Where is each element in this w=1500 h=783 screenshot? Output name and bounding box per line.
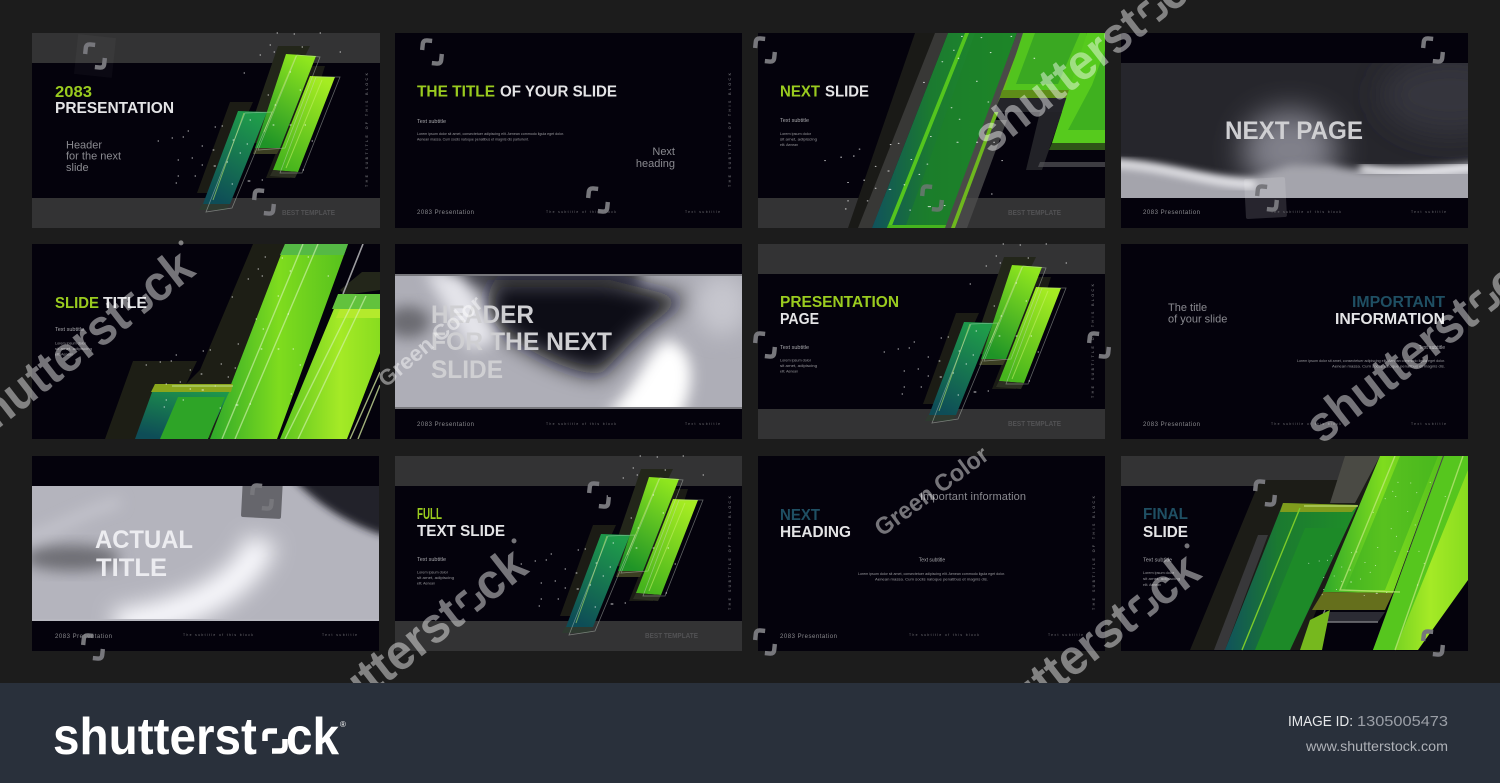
panel: slide 5, slide title: Text subtitle bbox=[55, 327, 84, 333]
panel: slide 2, title of your slide: Text subtitle bbox=[685, 210, 720, 214]
footer bar bbox=[0, 683, 1500, 783]
panel: slide 4, next page: The subtitle of this block bbox=[1271, 210, 1341, 214]
panel: slide 2, title of your slide: THE TITLE bbox=[417, 84, 495, 100]
watermark: shutterstock top bbox=[962, 0, 1226, 164]
panel: slide 12, final slide bbox=[1121, 456, 1468, 655]
panel: slide 10, full text slide: elit. Aenean bbox=[417, 582, 435, 586]
panel: slide 10, full text slide: Lorem ipsum dolor bbox=[417, 570, 449, 574]
panel: slide 7, presentation page bbox=[754, 244, 1110, 439]
panel: slide 2, title of your slide: THE SUBTITLE OF THIS BLOCK bbox=[728, 72, 732, 187]
panel: slide 5, slide title: SLIDE bbox=[55, 295, 99, 312]
panel: slide 10, full text slide: FULL bbox=[417, 506, 442, 523]
panel: slide 5, slide title bbox=[32, 244, 380, 439]
panel: slide 3, next slide bbox=[754, 33, 1105, 228]
watermark: shutterstock right bbox=[1294, 231, 1500, 454]
panel: slide 8, important information: 2083 Presentation bbox=[1143, 422, 1200, 428]
panel: slide 3, next slide: sit amet, adipiscing bbox=[780, 138, 817, 142]
panel: slide 11, next heading: Text subtitle bbox=[919, 558, 945, 564]
panel: slide 11, next heading bbox=[754, 456, 1105, 654]
panel: slide 3, next slide: Text subtitle bbox=[780, 118, 809, 124]
shutterstock logo: shutterstock bbox=[53, 708, 339, 766]
panel: slide 8, important information: Text subtitle bbox=[1419, 345, 1445, 351]
panel: slide 1, 2083 presentation: BEST TEMPLATE bbox=[282, 210, 335, 217]
panel: slide 10, full text slide: TEXT SLIDE bbox=[417, 523, 505, 540]
panel: slide 9, actual title: TITLE bbox=[96, 554, 167, 582]
panel: slide 9, actual title: The subtitle of this block bbox=[183, 633, 253, 637]
panel: slide 1, 2083 presentation: slide bbox=[66, 162, 89, 174]
panel: slide 12, final slide: SLIDE bbox=[1143, 524, 1188, 541]
panel: slide 2, title of your slide: Next bbox=[652, 146, 675, 158]
panel: slide 4, next page: NEXT PAGE bbox=[1225, 117, 1363, 145]
panel: slide 3, next slide: NEXT bbox=[780, 84, 820, 100]
grey silk image bbox=[395, 274, 742, 409]
panel: slide 6, header for the next slide: FOR THE NEXT bbox=[431, 328, 612, 356]
panel: slide 6, header for the next slide: The subtitle of this block bbox=[546, 422, 616, 426]
watermark: shutterstock left bbox=[0, 233, 211, 456]
panel: slide 9, actual title bbox=[20, 456, 400, 659]
panel: slide 5, slide title: TITLE bbox=[103, 295, 147, 312]
panel: slide 12, final slide: elit. Aenean bbox=[1143, 583, 1161, 587]
panel: slide 11, next heading: Lorem ipsum dolor sit amet, consectetuer adipiscing elit. Aenean commodo ligula eget dolor. bbox=[858, 572, 1005, 576]
panel: slide 7, presentation page: elit. Aenean bbox=[780, 370, 798, 374]
panel: slide 8, important information: Aenean massa. Cum sociis natoque penatibus et magnis dis. bbox=[1332, 364, 1445, 368]
panel: slide 10, full text slide: THE SUBTITLE OF THIS BLOCK bbox=[728, 495, 732, 610]
panel: slide 9, actual title: Text subtitle bbox=[322, 633, 357, 637]
panel: slide 6, header for the next slide: Text subtitle bbox=[685, 422, 720, 426]
panel: slide 11, next heading: THE SUBTITLE OF THIS BLOCK bbox=[1092, 495, 1096, 610]
panel: slide 1, 2083 presentation: Header bbox=[66, 140, 102, 152]
panel: slide 9, actual title: 2083 Presentation bbox=[55, 634, 112, 640]
panel: slide 11, next heading: The subtitle of this block bbox=[909, 633, 979, 637]
watermark: shutterstock lower middle bbox=[280, 531, 544, 754]
panel: slide 10, full text slide: BEST TEMPLATE bbox=[645, 633, 698, 640]
panel: slide 3, next slide: BEST TEMPLATE bbox=[1008, 210, 1061, 217]
panel: slide 10, full text slide: Text subtitle bbox=[417, 557, 446, 563]
panel: slide 2, title of your slide: OF YOUR SLIDE bbox=[500, 84, 617, 100]
panel: slide 10, full text slide: sit amet, adipiscing bbox=[417, 576, 454, 580]
panel: slide 11, next heading: NEXT bbox=[780, 507, 820, 524]
panel: slide 2, title of your slide: Aenean massa. Cum sociis natoque penatibus et magnis dis parturient. bbox=[417, 138, 529, 142]
footer bar: 1305005473 bbox=[1357, 713, 1448, 730]
panel: slide 1, 2083 presentation: PRESENTATION bbox=[55, 100, 174, 117]
panel: slide 4, next page: 2083 Presentation bbox=[1143, 210, 1200, 216]
panel: slide 11, next heading: Important information bbox=[920, 491, 1026, 503]
panel: slide 1, 2083 presentation: 2083 bbox=[55, 84, 92, 101]
panel: slide 7, presentation page: Lorem ipsum dolor bbox=[780, 358, 812, 362]
panel: slide 5, slide title: sit amet, adipiscing bbox=[55, 347, 92, 351]
panel: slide 11, next heading: 2083 Presentation bbox=[780, 634, 837, 640]
panel: slide 7, presentation page: THE SUBTITLE OF THIS BLOCK bbox=[1091, 283, 1095, 398]
panel: slide 4, next page bbox=[1121, 33, 1468, 228]
panel: slide 12, final slide: sit amet, adipiscing bbox=[1143, 577, 1180, 581]
panel: slide 6, header for the next slide: SLIDE bbox=[431, 356, 503, 384]
panel: slide 1, 2083 presentation bbox=[32, 33, 380, 228]
panel: slide 8, important information: IMPORTANT bbox=[1352, 294, 1445, 311]
shutterstock logo: ® bbox=[340, 720, 346, 729]
panel: slide 4, next page: Text subtitle bbox=[1411, 210, 1446, 214]
panel: slide 3, next slide: Lorem ipsum dolor bbox=[780, 132, 812, 136]
panel: slide 7, presentation page: sit amet, adipiscing bbox=[780, 364, 817, 368]
panel: slide 2, title of your slide: 2083 Presentation bbox=[417, 210, 474, 216]
panel: slide 7, presentation page: BEST TEMPLATE bbox=[1008, 421, 1061, 428]
panel: slide 2, title of your slide: Lorem ipsum dolor sit amet, consectetuer adipiscing elit. Aenean commodo ligula eget dolor. bbox=[417, 132, 564, 136]
panel: slide 2, title of your slide: heading bbox=[636, 158, 675, 170]
grey wave image bbox=[1121, 63, 1468, 198]
watermark: green color left: Green Color bbox=[373, 290, 488, 392]
panel: slide 8, important information: The title bbox=[1168, 302, 1207, 314]
panel: slide 2, title of your slide: Text subtitle bbox=[417, 119, 446, 125]
panel: slide 11, next heading: HEADING bbox=[780, 524, 851, 541]
panel: slide 7, presentation page: Text subtitle bbox=[780, 345, 809, 351]
panel: slide 3, next slide: SLIDE bbox=[825, 84, 869, 100]
panel: slide 12, final slide: Text subtitle bbox=[1143, 558, 1172, 564]
panel: slide 12, final slide: Lorem ipsum dolor bbox=[1143, 571, 1175, 575]
panel: slide 1, 2083 presentation: for the next bbox=[66, 151, 121, 163]
watermark: green color centre: Green Color bbox=[870, 441, 994, 542]
panel: slide 11, next heading: Aenean massa. Cum sociis natoque penatibus et magnis dis. bbox=[875, 578, 988, 582]
panel: slide 8, important information: of your slide bbox=[1168, 314, 1227, 326]
panel: slide 11, next heading: Text subtitle bbox=[1048, 633, 1083, 637]
panel: slide 6, header for the next slide: HEADER bbox=[431, 301, 534, 329]
panel: slide 6, header for the next slide bbox=[386, 244, 748, 439]
panel: slide 9, actual title: ACTUAL bbox=[95, 526, 193, 554]
panel: slide 12, final slide: FINAL bbox=[1143, 506, 1188, 523]
panel: slide 8, important information: Text subtitle bbox=[1411, 422, 1446, 426]
website url: www.shutterstock.com bbox=[1305, 738, 1448, 754]
panel: slide 10, full text slide bbox=[395, 456, 742, 651]
grey silk image bbox=[32, 486, 379, 621]
panel: slide 5, slide title: Lorem ipsum dolor bbox=[55, 342, 87, 346]
panel: slide 1, 2083 presentation: THE SUBTITLE OF THIS BLOCK bbox=[365, 72, 369, 187]
panel: slide 2, title of your slide bbox=[395, 33, 742, 228]
panel: slide 7, presentation page: PRESENTATION bbox=[780, 294, 899, 311]
panel: slide 6, header for the next slide: 2083 Presentation bbox=[417, 422, 474, 428]
image id: IMAGE ID: bbox=[1288, 713, 1353, 730]
panel: slide 7, presentation page: PAGE bbox=[780, 311, 819, 328]
panel: slide 8, important information: The subtitle of this block bbox=[1271, 422, 1341, 426]
panel: slide 3, next slide: elit. Aenean bbox=[780, 143, 798, 147]
panel: slide 5, slide title: elit. Aenean bbox=[55, 352, 73, 356]
panel: slide 2, title of your slide: The subtitle of this block bbox=[546, 210, 616, 214]
panel: slide 8, important information bbox=[1121, 244, 1468, 439]
watermark: shutterstock lower right bbox=[953, 536, 1217, 759]
panel: slide 8, important information: INFORMATION bbox=[1335, 311, 1445, 328]
panel: slide 8, important information: Lorem ipsum dolor sit amet, consectetuer adipiscing elit. Aenean commodo ligula eget dolor. bbox=[1297, 359, 1445, 363]
